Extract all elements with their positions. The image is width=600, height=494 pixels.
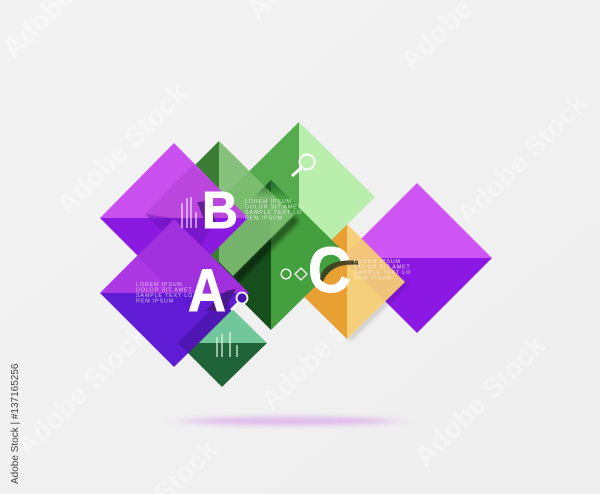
text block: B caption: LOREM IPSUM [245,199,292,205]
diamond: central dark green [196,180,347,330]
text block: A caption: LOREM IPSUM [136,282,183,288]
letter C: C [308,234,351,306]
text block: B caption: REM IPSUM [245,216,283,222]
diamond: small bottom green [178,299,267,387]
stock id label: Adobe Stock | #137165256 [10,363,21,484]
watermarks: Adobe Stock [10,319,154,462]
icon: magnifier bottom [231,292,248,310]
text block: C caption: SAMPLE TEXT LO [354,270,411,276]
letter B: B [202,182,238,240]
shadow under the graphic [185,416,395,426]
text block: A caption: REM IPSUM [136,298,174,304]
diamond: large light green [223,122,375,272]
text block: A caption: DOLOR SIT AMET [136,288,193,294]
icon: bars bottom [217,332,237,357]
diamond: right purple [342,183,492,340]
text block: A caption [136,282,193,304]
text block: B caption [245,199,302,222]
diamond: A purple [100,219,249,367]
text block: B caption: SAMPLE TEXT LO [245,210,302,216]
text block: B caption: DOLOR SIT AMET [245,204,302,210]
text block: A caption: SAMPLE TEXT LO [136,293,193,299]
watermarks: Adobe Stock [50,77,194,220]
text block: C caption: LOREM IPSUM [354,259,401,265]
watermarks: Adobe Stock [254,273,398,416]
letter A: A [188,257,226,324]
diamond: B purple [100,143,248,292]
text block: C caption: REM IPSUM [354,276,392,282]
text block: C caption [354,259,411,282]
diamond: orange [289,224,405,339]
icon: bars near B [182,197,196,228]
icon: magnifier top [292,154,314,176]
watermarks: Adobe Stock [408,329,552,472]
diamond: tall green band [144,141,299,291]
icons: circle and diamond [281,268,307,280]
watermarks: Adobe Stock [450,87,594,230]
text block: C caption: DOLOR SIT AMET [354,264,411,270]
